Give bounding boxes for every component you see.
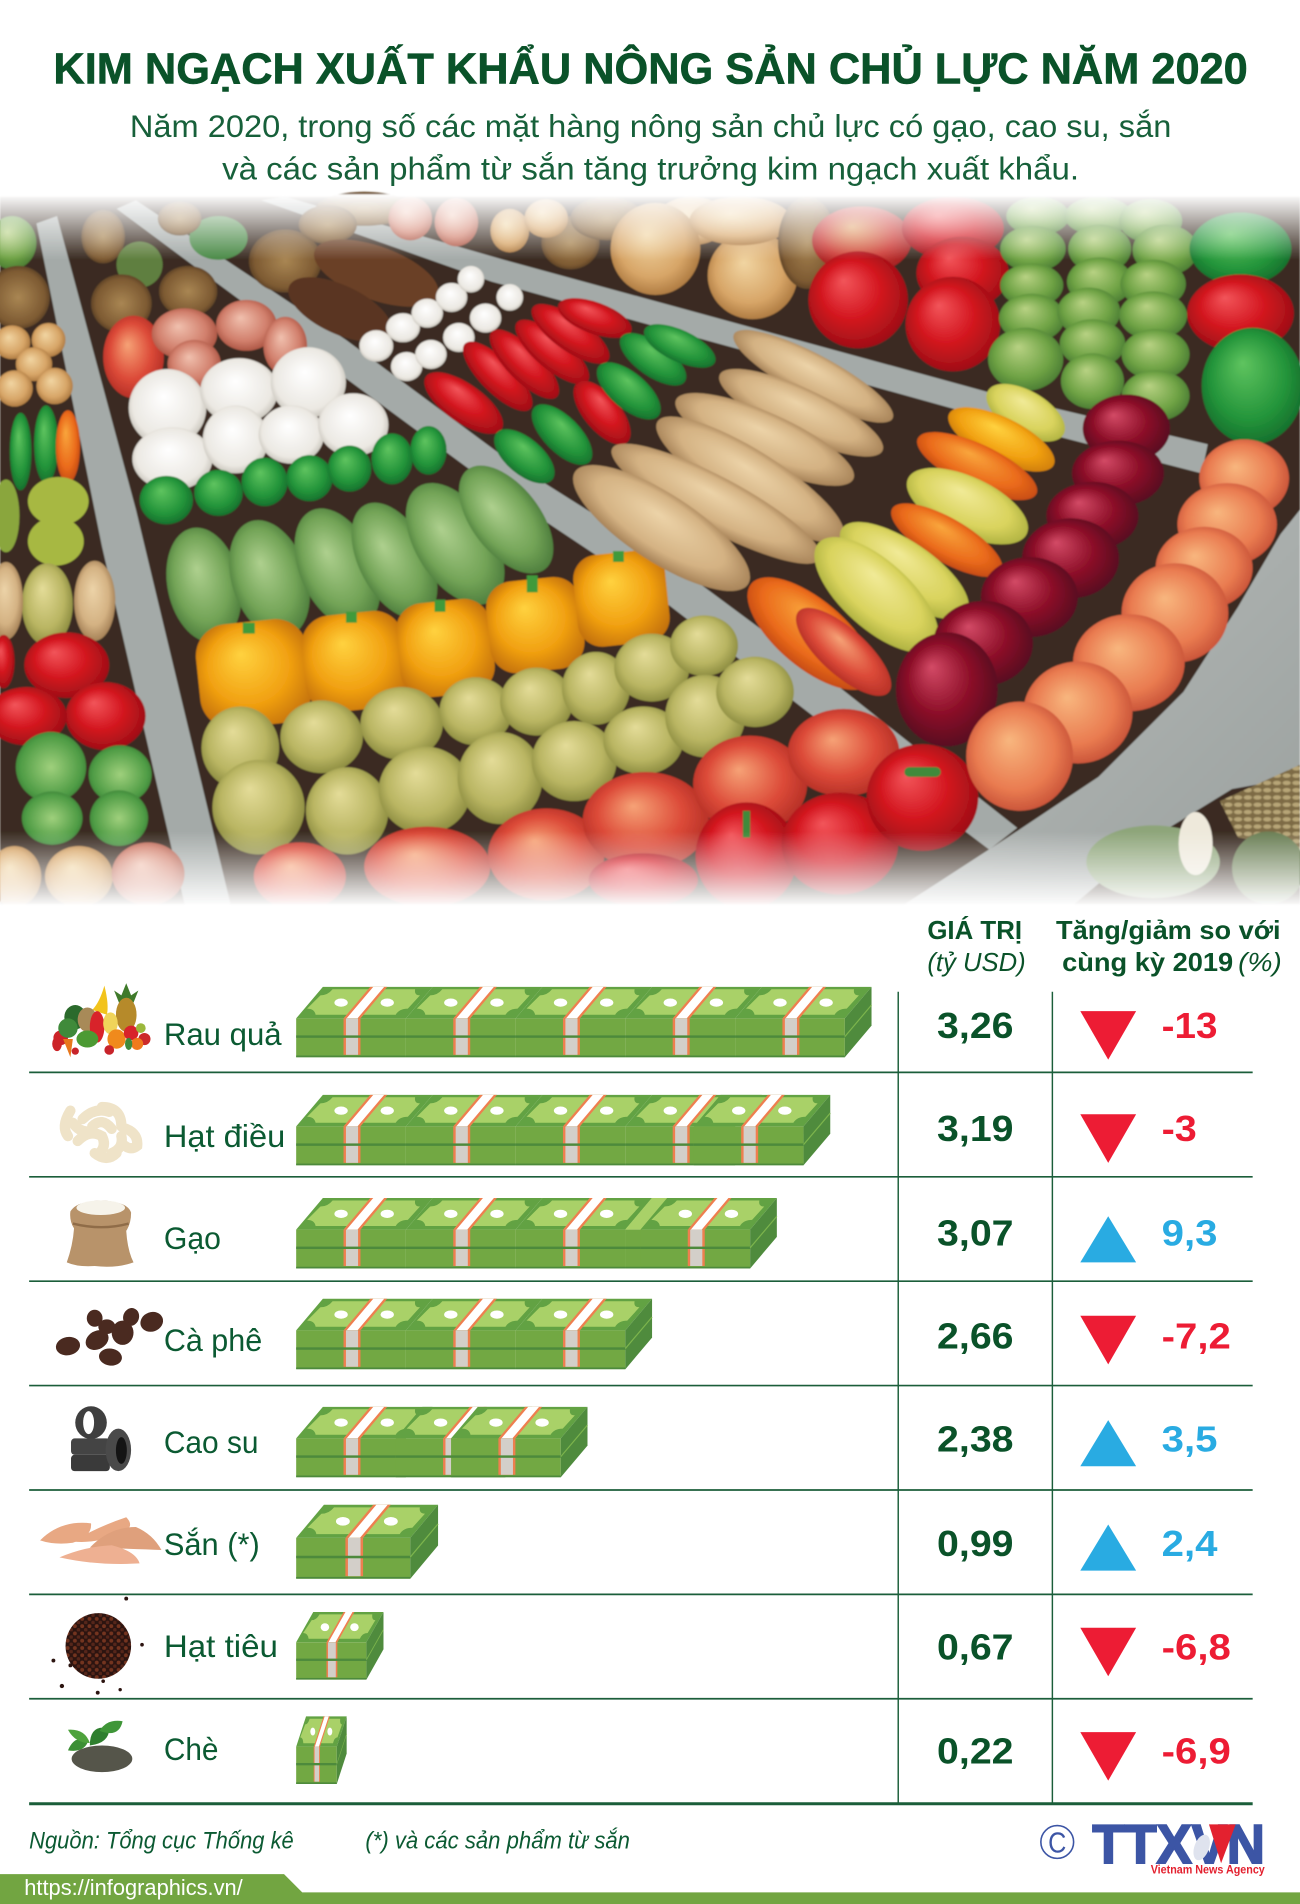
row: Rau quả — [52, 983, 1217, 1060]
icon: copyright — [1041, 1826, 1074, 1859]
money bar — [296, 1095, 830, 1165]
photo: vegetables and fruit display — [0, 192, 1300, 924]
top row: onions and dried produce — [316, 192, 836, 319]
label: Hạt điều — [164, 1118, 285, 1154]
money bar — [296, 1407, 587, 1477]
label: Cao su — [164, 1424, 259, 1460]
row: Gạo — [67, 1198, 1217, 1268]
value: 0,22 — [937, 1731, 1014, 1772]
top row: bell peppers — [1187, 212, 1300, 444]
icon: tyres — [71, 1406, 131, 1471]
source note: Nguồn: Tổng cục Thống kê — [29, 1828, 294, 1855]
column header: change versus 2019 — [1056, 915, 1282, 977]
bottom: peaches and red peppers — [254, 709, 978, 910]
money bar — [296, 1299, 652, 1369]
icon: cashews — [65, 1107, 137, 1158]
label: Gạo — [164, 1220, 221, 1256]
white fade edges — [0, 194, 1300, 924]
bottom right corner vegetables — [1086, 765, 1300, 904]
column header: change versus 2019: cùng kỳ 2019 — [1062, 947, 1233, 977]
arrow down — [1080, 1316, 1136, 1364]
change: 3,5 — [1162, 1419, 1217, 1460]
subtitle — [130, 108, 1171, 187]
subtitle: Năm 2020, trong số các mặt hàng nông sản chủ lực có gạo, cao su, sắn — [130, 108, 1171, 144]
value: 2,38 — [937, 1419, 1014, 1460]
middle section: garlic — [129, 347, 388, 490]
change: 2,4 — [1162, 1523, 1218, 1564]
footnote: (*) và các sản phẩm từ sắn — [365, 1828, 630, 1855]
column header: value: GIÁ TRỊ — [927, 915, 1022, 945]
change: -7,2 — [1162, 1316, 1231, 1357]
title: KIM NGẠCH XUẤT KHẨU NÔNG SẢN CHỦ LỰC NĂM 2020 — [53, 45, 1248, 94]
pepper stems — [243, 551, 624, 634]
label: Hạt tiêu — [164, 1628, 278, 1664]
right band: peaches — [966, 439, 1289, 811]
icon: cassava roots — [40, 1517, 161, 1564]
subtitle: và các sản phẩm từ sắn tăng trưởng kim ngạch xuất khẩu. — [222, 151, 1079, 187]
money bar — [296, 1612, 383, 1680]
middle section: chestnuts and pine cones — [81, 201, 447, 355]
row: Hạt điều — [65, 1095, 1197, 1165]
middle section: potatoes — [201, 615, 794, 855]
row: Cao su — [71, 1406, 1217, 1477]
logo: TTXVN: TTXVN — [1092, 1814, 1265, 1875]
top row: green tomatillos — [988, 197, 1198, 421]
gray dividers and wall — [36, 197, 1300, 904]
icon: rice sack — [67, 1200, 134, 1267]
arrow up — [1080, 1420, 1136, 1466]
middle band: chilies — [415, 290, 722, 494]
value: 0,99 — [937, 1523, 1014, 1564]
column header: value: (tỷ USD) — [927, 947, 1026, 977]
arrow down — [1080, 1732, 1136, 1781]
middle section: yellow bell peppers — [193, 548, 672, 731]
icon: tea leaves — [68, 1721, 132, 1772]
left column produce — [0, 216, 185, 907]
row: Cà phê — [54, 1299, 1231, 1369]
money bar — [296, 987, 872, 1057]
footer url: https://infographics.vn/ — [24, 1875, 244, 1900]
value: 0,67 — [937, 1626, 1014, 1667]
change: 9,3 — [1162, 1212, 1217, 1253]
column header: value — [927, 915, 1026, 977]
label: Cà phê — [164, 1322, 262, 1358]
label: Sắn (*) — [164, 1526, 260, 1562]
change: -6,9 — [1162, 1731, 1231, 1772]
logo: TTXVN: Vietnam News Agency — [1151, 1863, 1265, 1877]
icon: copyright: C — [1048, 1827, 1066, 1859]
value: 3,26 — [937, 1005, 1014, 1046]
change: -6,8 — [1162, 1626, 1231, 1667]
money bar — [296, 1716, 347, 1784]
icon: coffee beans — [54, 1306, 166, 1367]
column header: change versus 2019: Tăng/giảm so với — [1056, 915, 1281, 945]
middle section: green figs — [140, 426, 447, 524]
top row: red apples — [808, 197, 1009, 371]
middle band: sweet potatoes — [556, 315, 903, 613]
middle section: zucchini — [156, 449, 572, 650]
arrow down — [1080, 1114, 1136, 1163]
column header: change versus 2019: (%) — [1238, 947, 1282, 977]
icon: fruit and vegetables — [52, 983, 151, 1057]
value: 3,19 — [937, 1108, 1014, 1149]
icon: peppercorns — [51, 1597, 144, 1695]
money bar — [296, 1198, 777, 1268]
middle band: colourful sweet peppers — [729, 372, 1074, 710]
label: Chè — [164, 1731, 218, 1767]
change: -3 — [1162, 1108, 1197, 1149]
arrow up — [1080, 1216, 1136, 1262]
money bar — [296, 1505, 438, 1579]
row: Chè — [68, 1716, 1231, 1784]
value: 2,66 — [937, 1316, 1014, 1357]
row: Hạt tiêu — [51, 1597, 1231, 1695]
middle band: garlic strands — [359, 266, 523, 381]
right band: dark red apples — [896, 394, 1170, 747]
arrow up — [1080, 1525, 1136, 1571]
footer bar — [0, 1874, 1300, 1904]
table grid lines — [29, 992, 1253, 1804]
arrow down — [1080, 1628, 1136, 1676]
row: Sắn — [40, 1505, 1218, 1579]
label: Rau quả — [164, 1016, 282, 1052]
arrow down — [1080, 1011, 1136, 1060]
change: -13 — [1162, 1005, 1217, 1046]
value: 3,07 — [937, 1212, 1014, 1253]
middle section: red onions — [103, 300, 307, 398]
